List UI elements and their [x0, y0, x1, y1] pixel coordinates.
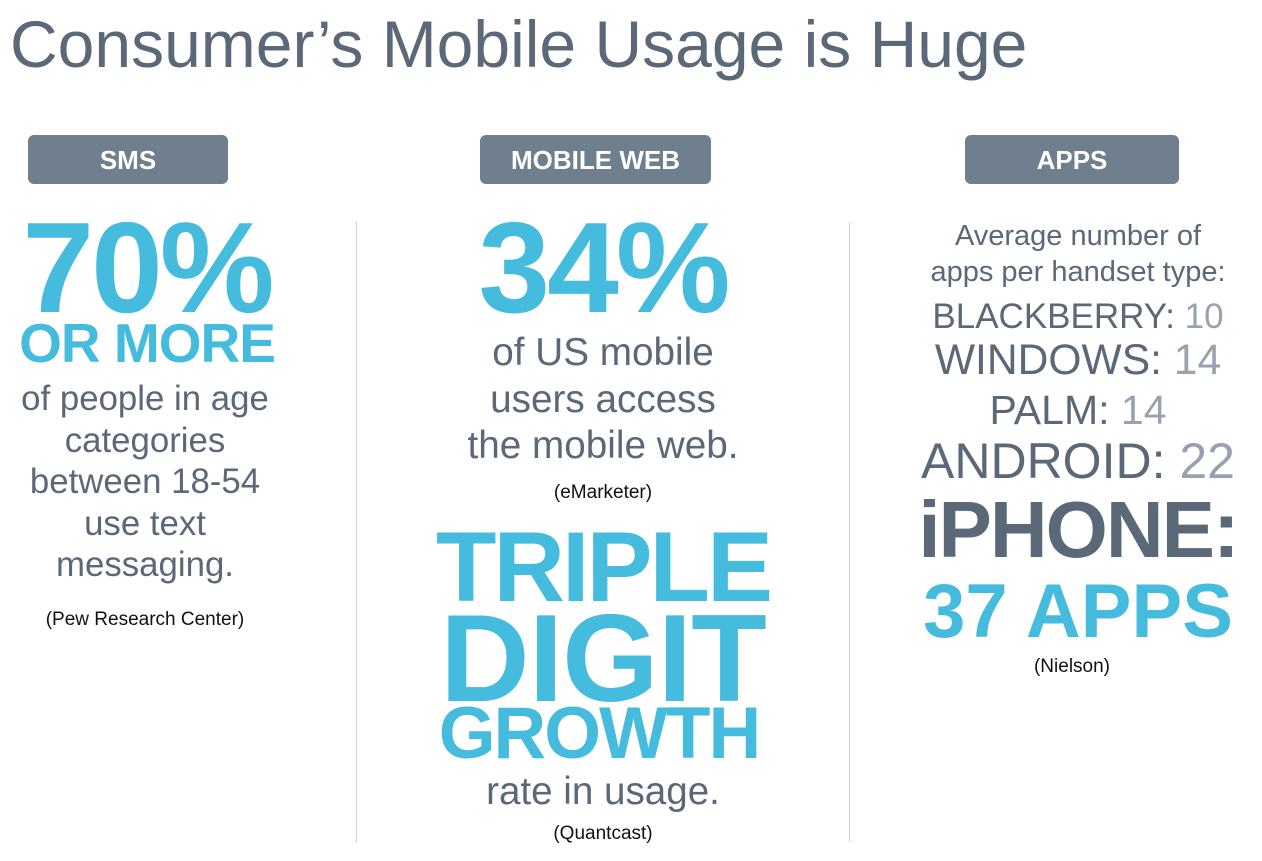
pill: MOBILE WEB [480, 135, 711, 184]
description: between 18-54 [30, 462, 260, 501]
handset list: WINDOWS: 14 [935, 336, 1221, 384]
OR MORE: OR MORE [19, 312, 275, 374]
intro text [930, 220, 1226, 288]
pill: SMS: SMS [100, 144, 156, 174]
panel: Mobile Web [436, 135, 770, 844]
intro text: Average number of [955, 220, 1201, 252]
panel: SMS [19, 135, 275, 630]
source: (Quantcast) [553, 823, 653, 844]
big stat 70%: 70% [22, 196, 272, 340]
TRIPLE DIGIT GROWTH: TRIPLE [436, 511, 770, 622]
description: users access [490, 378, 716, 420]
source: (eMarketer) [554, 482, 652, 503]
TRIPLE DIGIT GROWTH: GROWTH [439, 693, 759, 774]
handset list: PALM: 14 [990, 387, 1166, 433]
source: (Nielson) [1034, 656, 1110, 677]
handset list [918, 297, 1238, 654]
description [21, 379, 269, 584]
description: the mobile web. [468, 424, 738, 467]
handset list: iPHONE: [918, 485, 1238, 574]
intro text: apps per handset type: [930, 256, 1226, 288]
description: of people in age [21, 379, 269, 418]
title: Consumer’s Mobile Usage is Huge [10, 7, 1027, 81]
pill: APPS: APPS [1037, 144, 1107, 174]
panel: Apps: 37 APPS [923, 569, 1233, 654]
pill: MOBILE WEB: MOBILE WEB [511, 144, 680, 174]
description: of US mobile [492, 331, 714, 374]
description: messaging. [56, 545, 234, 584]
big stat 34%: 34% [478, 196, 728, 340]
source: (Pew Research Center) [46, 609, 244, 630]
description [468, 331, 738, 467]
pill: APPS [965, 135, 1179, 184]
description: use text [84, 504, 206, 542]
handset list: ANDROID: 22 [921, 433, 1235, 489]
TRIPLE DIGIT GROWTH [436, 511, 770, 774]
handset list: BLACKBERRY: 10 [932, 297, 1224, 336]
panel: Apps [918, 135, 1238, 677]
description: categories [65, 420, 225, 460]
description 2: rate in usage. [486, 770, 720, 813]
pill: SMS [28, 135, 228, 184]
TRIPLE DIGIT GROWTH: DIGIT [440, 590, 766, 728]
